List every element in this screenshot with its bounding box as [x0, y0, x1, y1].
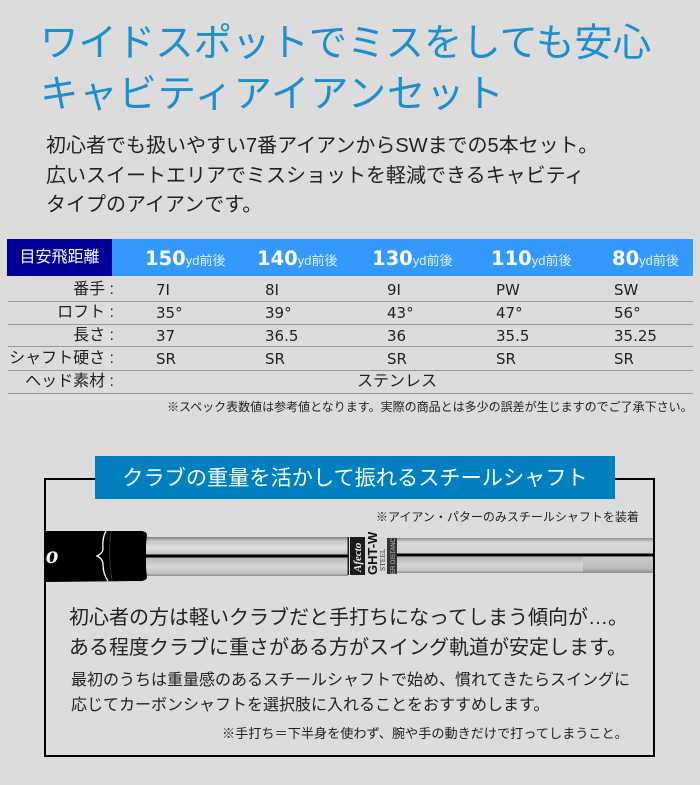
distance 140yd: 140yd前後 — [257, 247, 337, 270]
grip: o — [46, 542, 58, 569]
title: ワイドスポットでミスをしても安心 — [40, 22, 651, 65]
intro text: 広いスイートエリアでミスショットを軽減できるキャビティ — [46, 164, 584, 186]
panel heading: クラブの重量を活かして振れるスチールシャフト — [122, 467, 588, 490]
detail text — [71, 671, 630, 714]
distance 110yd: 110yd前後 — [491, 247, 571, 270]
row: club number: SW — [614, 281, 638, 299]
row: shaft stiffness: SR — [265, 350, 285, 368]
row: head material — [25, 372, 437, 390]
distance 80yd: 80yd前後 — [612, 247, 679, 270]
distance 130yd: 130yd前後 — [372, 247, 452, 270]
row: club number: 9I — [387, 281, 401, 299]
row: loft: 35° — [156, 304, 183, 322]
row: shaft stiffness: SR — [156, 350, 176, 368]
row: loft: 43° — [387, 304, 414, 322]
row: loft: ロフト : — [57, 304, 114, 321]
row: length: 35.25 — [614, 327, 657, 345]
row: shaft stiffness: SR — [496, 350, 516, 368]
row: club number: 7I — [156, 281, 170, 299]
row: length — [73, 327, 657, 345]
title — [40, 22, 651, 116]
shaft label band: ER DISTANCE — [391, 534, 397, 574]
row: club number: 8I — [265, 281, 279, 299]
row: club number — [73, 280, 638, 299]
main message: 初心者の方は軽いクラブだと手打ちになってしまう傾向が…。 — [69, 607, 628, 629]
footnote: hand hitting: ※手打ち＝下半身を使わず、腕や手の動きだけで打ってしまうこと。 — [222, 726, 628, 741]
row: loft: 39° — [265, 304, 292, 322]
main message — [69, 606, 628, 658]
row: club number: PW — [496, 281, 520, 299]
shaft label band: Afecto — [352, 542, 364, 573]
panel heading — [95, 456, 615, 499]
table footnote: ※スペック表数値は参考値となります。実際の商品とは多少の誤差が生じますのでご了承下さい。 — [167, 400, 693, 414]
shaft note: ※アイアン・パターのみスチールシャフトを装着 — [376, 510, 639, 524]
row: shaft stiffness: SR — [614, 350, 634, 368]
row: length: 36.5 — [265, 327, 298, 345]
row: shaft stiffness: SR — [387, 350, 407, 368]
row: head material: ステンレス — [357, 373, 437, 390]
detail text: 最初のうちは重量感のあるスチールシャフトで始め、慣れてきたらスイングに — [71, 672, 630, 689]
header label: target distance — [7, 239, 112, 276]
detail text: 応じてカーボンシャフトを選択肢に入れることをおすすめします。 — [71, 696, 549, 714]
header label: target distance: 目安飛距離 — [19, 249, 100, 266]
intro text: 初心者でも扱いやすい7番アイアンからSWまでの5本セット。 — [46, 135, 598, 157]
row: shaft stiffness — [9, 350, 634, 368]
title: キャビティアイアンセット — [40, 73, 505, 116]
shaft label band — [348, 531, 397, 575]
image: grip and steel shaft — [46, 530, 653, 582]
main message: ある程度クラブに重さがある方がスイング軌道が安定します。 — [69, 636, 627, 658]
intro text — [46, 135, 598, 216]
row: loft — [57, 304, 641, 322]
intro text: タイプのアイアンです。 — [46, 194, 262, 216]
spec table — [7, 239, 693, 276]
row: length: 35.5 — [496, 327, 529, 345]
row: head material: ヘッド素材 : — [25, 373, 114, 390]
grip — [46, 531, 147, 582]
distance 150yd: 150yd前後 — [145, 247, 225, 270]
row: length: 37 — [156, 327, 175, 345]
row: loft: 56° — [614, 304, 641, 322]
row: club number: 番手 : — [73, 281, 114, 298]
table header bar — [7, 239, 693, 276]
shaft label band: STEEL — [378, 548, 387, 571]
row: length: 36 — [387, 327, 406, 345]
row: shaft stiffness: シャフト硬さ : — [9, 350, 114, 367]
shaft tube — [146, 537, 654, 576]
row: length: 長さ : — [73, 327, 114, 344]
panel: steel shaft — [44, 478, 655, 757]
shaft label band: GHT-W — [365, 531, 380, 575]
row: loft: 47° — [496, 304, 523, 322]
